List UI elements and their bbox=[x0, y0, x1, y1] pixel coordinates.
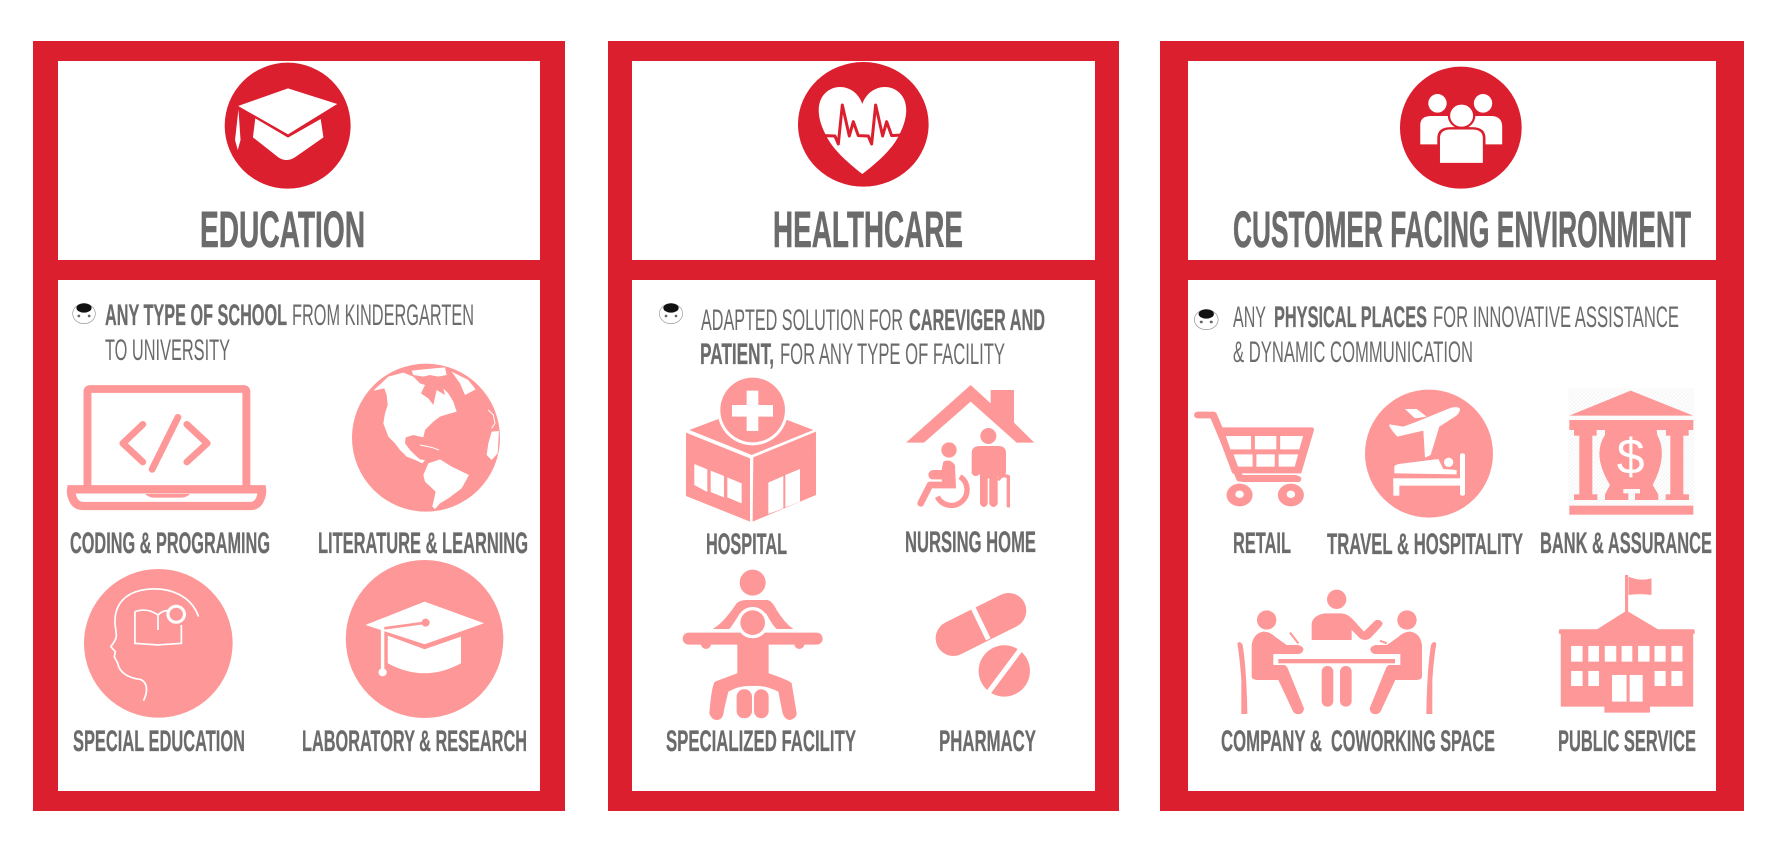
icon: shopping cart bbox=[1198, 415, 1314, 506]
icon: robot bullet bbox=[1194, 309, 1218, 330]
icon: cap in circle bbox=[346, 560, 503, 718]
label: travel and hospitality: TRAVEL & HOSPITALITY bbox=[1327, 528, 1523, 561]
label: company and coworking space: COWORKING SPACE bbox=[1331, 725, 1495, 758]
label: special education: SPECIAL EDUCATION bbox=[73, 725, 245, 758]
intro text: customer: & DYNAMIC COMMUNICATION bbox=[1233, 336, 1473, 369]
intro text: healthcare: ADAPTED SOLUTION FOR bbox=[701, 304, 903, 337]
label: company and coworking space bbox=[1221, 725, 1495, 758]
icon: robot bullet bbox=[73, 303, 95, 324]
customer body box bbox=[1188, 280, 1716, 791]
panel: healthcare bbox=[608, 41, 1119, 811]
heading: education: EDUCATION bbox=[200, 201, 365, 258]
intro text: healthcare: PATIENT, bbox=[700, 338, 774, 371]
intro text: customer: ANY bbox=[1233, 301, 1266, 334]
label: nursing home: NURSING HOME bbox=[905, 526, 1036, 559]
panel: customer facing environment bbox=[1160, 41, 1744, 811]
intro text: healthcare: CAREVIGER AND bbox=[909, 304, 1045, 337]
icon: head with book bbox=[84, 569, 233, 718]
intro text: education: FROM KINDERGARTEN bbox=[292, 299, 474, 332]
label: pharmacy: PHARMACY bbox=[939, 725, 1036, 758]
icon: bank bbox=[1568, 388, 1694, 516]
education red frame bbox=[33, 41, 565, 811]
intro text: education: ANY TYPE OF SCHOOL bbox=[105, 299, 287, 332]
label: specialized facility: SPECIALIZED FACILITY bbox=[666, 725, 856, 758]
healthcare header box bbox=[632, 61, 1095, 260]
icon: physical therapy bbox=[683, 570, 823, 720]
heading: healthcare: HEALTHCARE bbox=[773, 201, 963, 258]
label: literature and learning: LITERATURE & LEARNING bbox=[318, 527, 528, 560]
icon: graduation cap in red circle bbox=[225, 63, 351, 189]
customer header box bbox=[1188, 61, 1716, 260]
icon: nursing home bbox=[906, 385, 1034, 507]
icon: globe bbox=[352, 364, 500, 512]
icon: hospital bbox=[686, 375, 816, 522]
healthcare red frame bbox=[608, 41, 1119, 811]
intro text: healthcare: FOR ANY TYPE OF FACILITY bbox=[780, 338, 1005, 371]
icon: laptop with code bbox=[71, 389, 262, 506]
icon: pills bbox=[953, 608, 1030, 697]
intro text: education bbox=[105, 299, 474, 367]
customer red frame bbox=[1160, 41, 1744, 811]
healthcare body box bbox=[632, 280, 1095, 791]
label: company and coworking space: COMPANY & bbox=[1221, 725, 1322, 758]
intro text: customer bbox=[1233, 301, 1679, 369]
intro text: healthcare bbox=[700, 304, 1045, 371]
label: retail: RETAIL bbox=[1233, 527, 1291, 560]
icon: plane and bed bbox=[1365, 390, 1493, 518]
dollar sign: $ bbox=[1617, 429, 1645, 485]
education body box bbox=[58, 280, 540, 791]
icon: heart with pulse in red circle bbox=[798, 62, 929, 187]
label: coding and programing: CODING & PROGRAMING bbox=[70, 527, 270, 560]
icon: robot bullet bbox=[659, 303, 683, 324]
label: laboratory and research: LABORATORY & RESEARCH bbox=[302, 725, 527, 758]
intro text: customer: PHYSICAL PLACES bbox=[1274, 301, 1427, 334]
panel: education bbox=[33, 41, 565, 811]
icon: meeting around a table bbox=[1237, 590, 1436, 714]
label: hospital: HOSPITAL bbox=[706, 528, 787, 561]
intro text: education: TO UNIVERSITY bbox=[105, 334, 230, 367]
icon: public building bbox=[1559, 575, 1695, 713]
education header box bbox=[58, 61, 540, 260]
icon: people in red circle bbox=[1400, 67, 1522, 189]
